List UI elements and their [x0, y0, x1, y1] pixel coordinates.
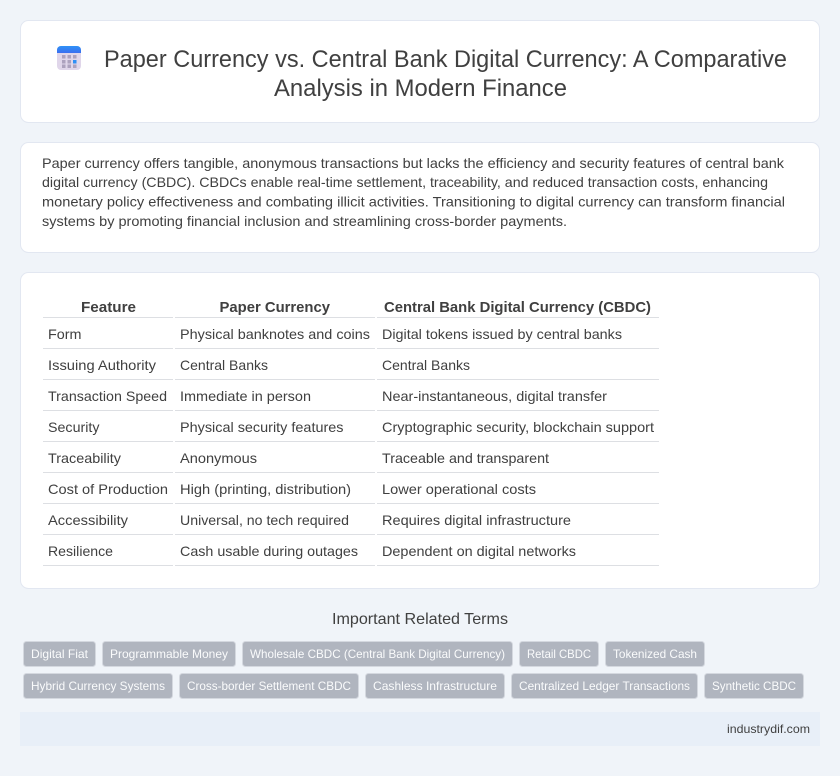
table row: traceability: [48, 450, 549, 466]
table row: transaction speed: Immediate in person: [180, 388, 311, 404]
table row: traceability: Anonymous: [180, 450, 257, 466]
tag: retail cbdc: [520, 642, 598, 666]
text block: summary paragraph: systems by promoting financial inclusion and streamlining cross-border payments.: [42, 213, 567, 229]
panel: comparison table: [20, 272, 820, 588]
tag: cashless infrastructure: [366, 674, 504, 698]
tag: cashless infrastructure: Cashless Infrastructure: [373, 679, 497, 693]
tag: tokenized cash: [606, 642, 704, 666]
table row: traceability: Traceable and transparent: [382, 450, 549, 466]
tag list: [24, 642, 804, 698]
table row: accessibility: Universal, no tech required: [180, 512, 349, 528]
table row: issuing authority: Issuing Authority: [48, 357, 156, 373]
tag: cross-border settlement cbdc: Cross-border Settlement CBDC: [187, 679, 351, 693]
table row: resilience: [48, 543, 576, 559]
tag: wholesale cbdc: Wholesale CBDC (Central Bank Digital Currency): [250, 647, 505, 661]
table header: Paper Currency: [220, 299, 331, 316]
text block: summary paragraph: digital currency (CBDC). CBDCs enable real-time settlement, traceability, and reduced transaction costs, enhancing: [42, 174, 768, 190]
table row: transaction speed: [48, 388, 607, 404]
table row: resilience: Cash usable during outages: [180, 543, 358, 559]
footer: [20, 712, 820, 746]
table header: Feature: [81, 299, 136, 316]
table row: cost of production: Lower operational costs: [382, 481, 536, 497]
table row: form: Form: [48, 326, 82, 342]
text block: summary paragraph: [42, 155, 785, 229]
table row: security: [48, 419, 654, 435]
table row: issuing authority: [48, 357, 470, 373]
tag: synthetic cbdc: Synthetic CBDC: [712, 679, 796, 693]
panel: summary: [20, 142, 820, 252]
table row: issuing authority: Central Banks: [382, 357, 470, 373]
tag: centralized ledger transactions: Centralized Ledger Transactions: [519, 679, 690, 693]
tag: programmable money: [102, 642, 236, 666]
table row: cost of production: High (printing, distribution): [180, 481, 351, 497]
tag: tokenized cash: Tokenized Cash: [613, 647, 697, 661]
table row: transaction speed: Near-instantaneous, digital transfer: [382, 388, 607, 404]
table header: Central Bank Digital Currency (CBDC): [384, 299, 651, 316]
footer: industrydif.com: [727, 722, 810, 736]
text block: summary paragraph: monetary policy effectiveness and combating illicit activities. Transitioning to digital currency can transform financial: [42, 194, 785, 210]
table row: resilience: Resilience: [48, 543, 113, 559]
table row: form: Digital tokens issued by central banks: [382, 326, 622, 342]
tag: digital fiat: Digital Fiat: [31, 647, 89, 661]
table row: security: Physical security features: [180, 419, 344, 435]
text block: summary paragraph: Paper currency offers tangible, anonymous transactions but lacks the efficiency and security features of central bank: [42, 155, 785, 171]
heading: important related terms: Important Related Terms: [332, 611, 508, 628]
table row: accessibility: [48, 512, 571, 528]
tag: synthetic cbdc: [704, 674, 804, 698]
tag: digital fiat: [24, 642, 96, 666]
table row: security: Cryptographic security, blockchain support: [382, 419, 654, 435]
tag: cross-border settlement cbdc: [180, 674, 358, 698]
table row: resilience: Dependent on digital networks: [382, 543, 576, 559]
table row: security: Security: [48, 419, 100, 435]
table header: [81, 299, 651, 316]
panel: title card: [20, 20, 820, 122]
tag: wholesale cbdc: [242, 642, 512, 666]
table row: form: Physical banknotes and coins: [180, 326, 370, 342]
title: Analysis in Modern Finance: [274, 75, 567, 102]
title: [104, 46, 787, 102]
table row: form: [48, 326, 622, 342]
table row: issuing authority: Central Banks: [180, 357, 268, 373]
tag: programmable money: Programmable Money: [110, 647, 228, 661]
tag: retail cbdc: Retail CBDC: [527, 647, 591, 661]
table row: cost of production: [48, 481, 536, 497]
icon: calendar: [57, 46, 81, 70]
title: Paper Currency vs. Central Bank Digital Currency: A Comparative: [104, 46, 787, 73]
tag: centralized ledger transactions: [512, 674, 698, 698]
table row: accessibility: Requires digital infrastructure: [382, 512, 571, 528]
table row: traceability: Traceability: [48, 450, 121, 466]
table row: cost of production: Cost of Production: [48, 481, 168, 497]
table row: accessibility: Accessibility: [48, 512, 128, 528]
tag: hybrid currency systems: Hybrid Currency Systems: [31, 679, 165, 693]
table row: transaction speed: Transaction Speed: [48, 388, 167, 404]
tag: hybrid currency systems: [24, 674, 172, 698]
